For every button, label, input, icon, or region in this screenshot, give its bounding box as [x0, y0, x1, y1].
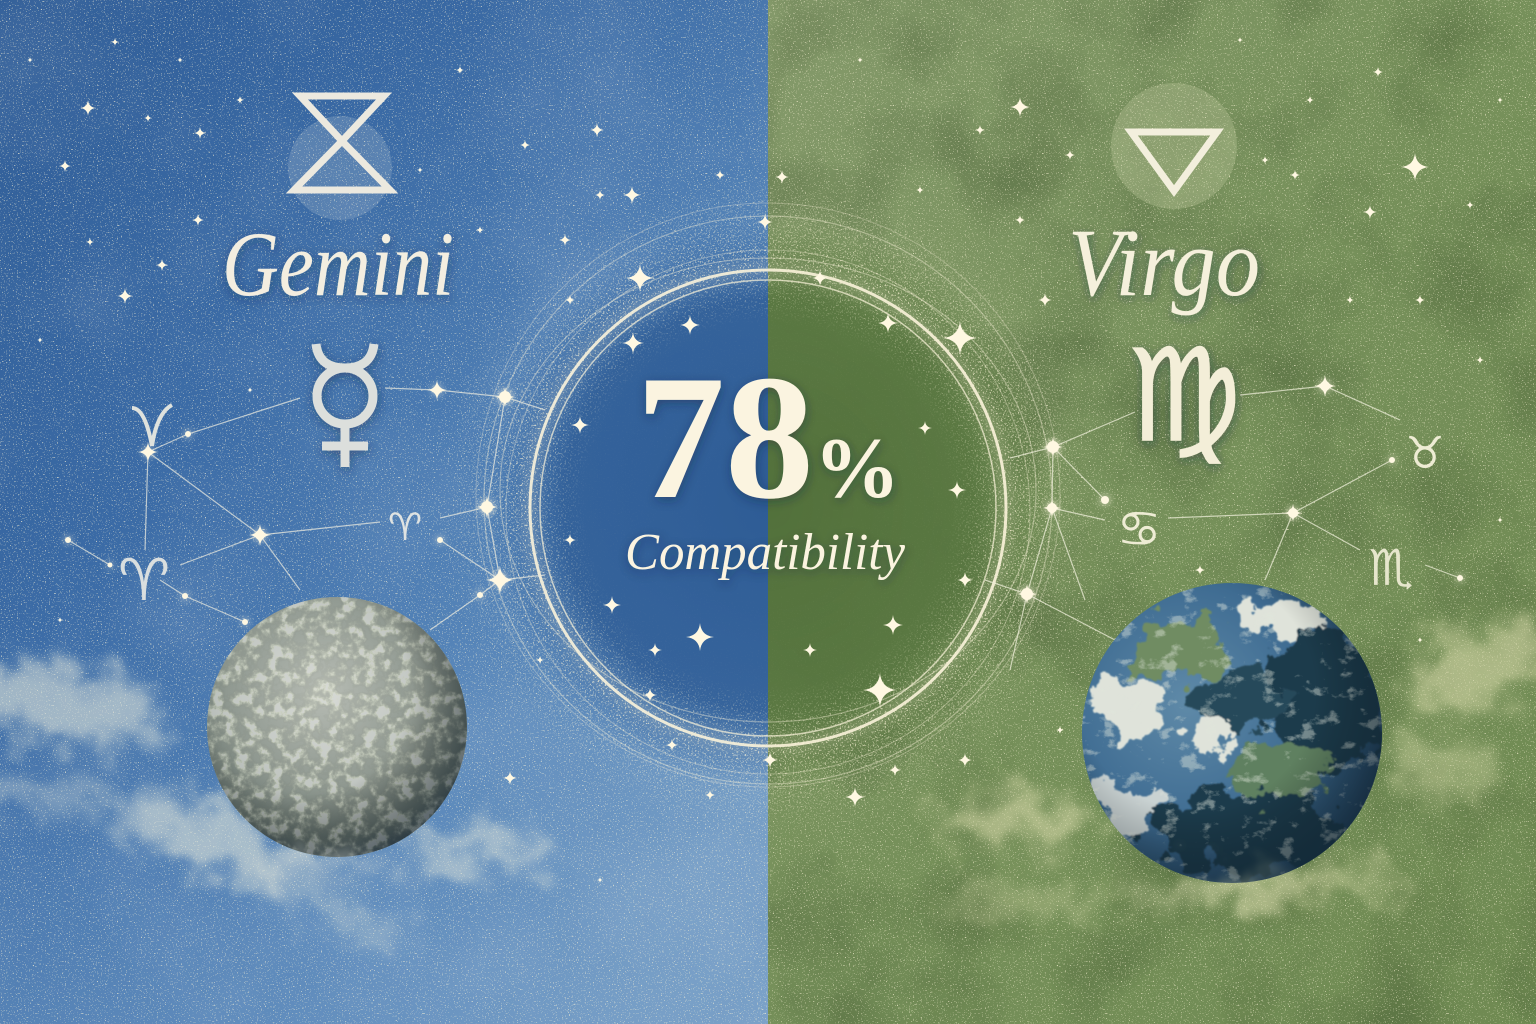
heading: Gemini: Gemini — [222, 213, 454, 315]
sparkle stars — [27, 37, 1503, 883]
icon: Virgo symbol: ♍︎ — [1127, 322, 1241, 471]
panel: Virgo green side background — [768, 0, 1536, 1024]
central dark circle — [483, 220, 1053, 790]
compatibility rings — [476, 203, 1060, 787]
clouds: left — [0, 646, 560, 948]
planet: Mercury — [207, 597, 467, 857]
panel: Gemini blue side background — [0, 0, 768, 1024]
icon: Cancer symbol: ♋︎ — [1117, 500, 1161, 558]
icon: Scorpio symbol: ♏︎ — [1369, 539, 1413, 597]
icon: Virgo earth element circle and triangle — [1111, 83, 1237, 209]
heading: Virgo: Virgo — [1068, 209, 1260, 316]
clouds: right — [935, 609, 1536, 911]
constellation lines: Virgo side — [985, 386, 1460, 670]
icon: Aries symbol center left: ♈︎ — [388, 505, 422, 549]
icon: Aries symbol lower left: ♈︎ — [118, 546, 170, 614]
headline: 78%: 78% — [636, 338, 900, 536]
icon: Taurus symbol: ♉︎ — [1405, 428, 1445, 479]
constellation lines: Gemini side — [68, 388, 545, 630]
subheading: Compatibility: Compatibility — [625, 524, 906, 581]
icon: small Aries mark near star — [132, 405, 172, 446]
clouds overlapping planets — [250, 861, 1300, 901]
stardust around the ring — [444, 182, 1090, 827]
planet: Earth — [1082, 583, 1383, 883]
icon: Mercury symbol — [316, 344, 374, 467]
icon: Gemini air element circle and hourglass — [288, 96, 392, 220]
constellation nodes — [65, 381, 1463, 625]
